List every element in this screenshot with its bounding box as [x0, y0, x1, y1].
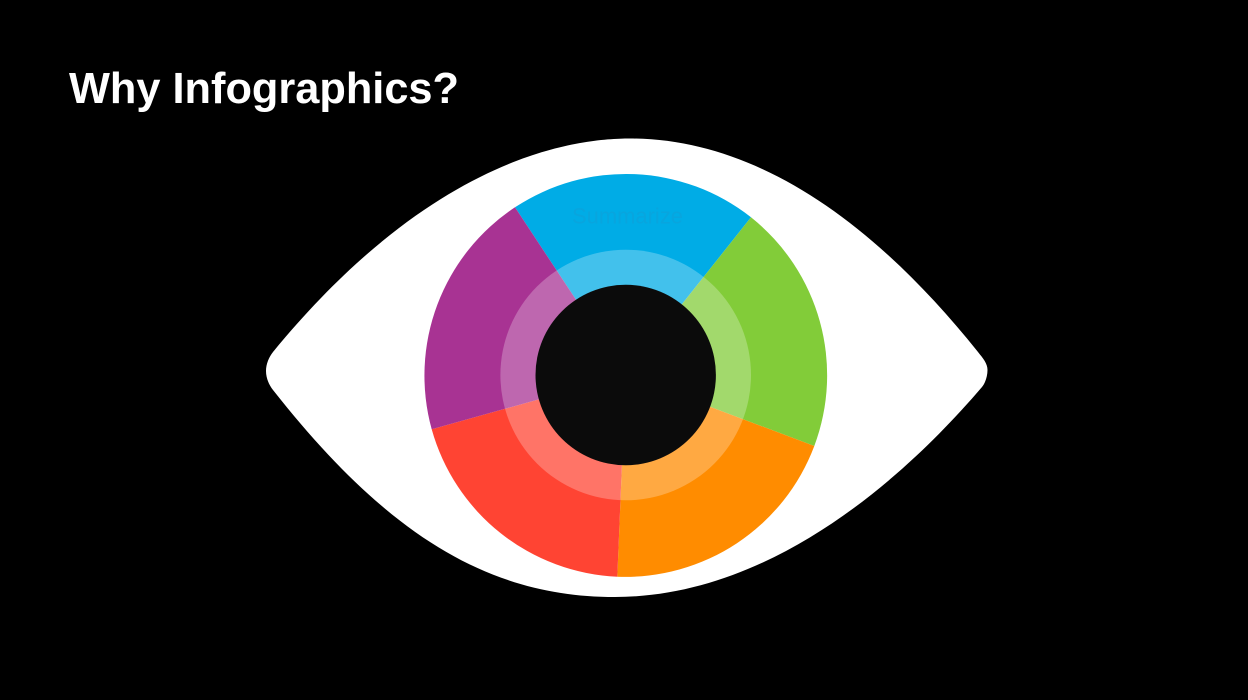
- pupil: [536, 285, 716, 465]
- eye outline: [266, 138, 988, 597]
- title: Why Infographics?: [69, 64, 459, 113]
- segment: orange: [617, 375, 814, 577]
- translucent inner ring: [500, 250, 751, 500]
- segment: purple: [424, 207, 626, 429]
- segment label: Summarize: [572, 204, 683, 228]
- segment: blue: [515, 174, 751, 375]
- segment: green: [626, 217, 827, 446]
- iris segments: [424, 174, 827, 577]
- icon: eye: [266, 138, 988, 597]
- segment: red: [432, 375, 626, 577]
